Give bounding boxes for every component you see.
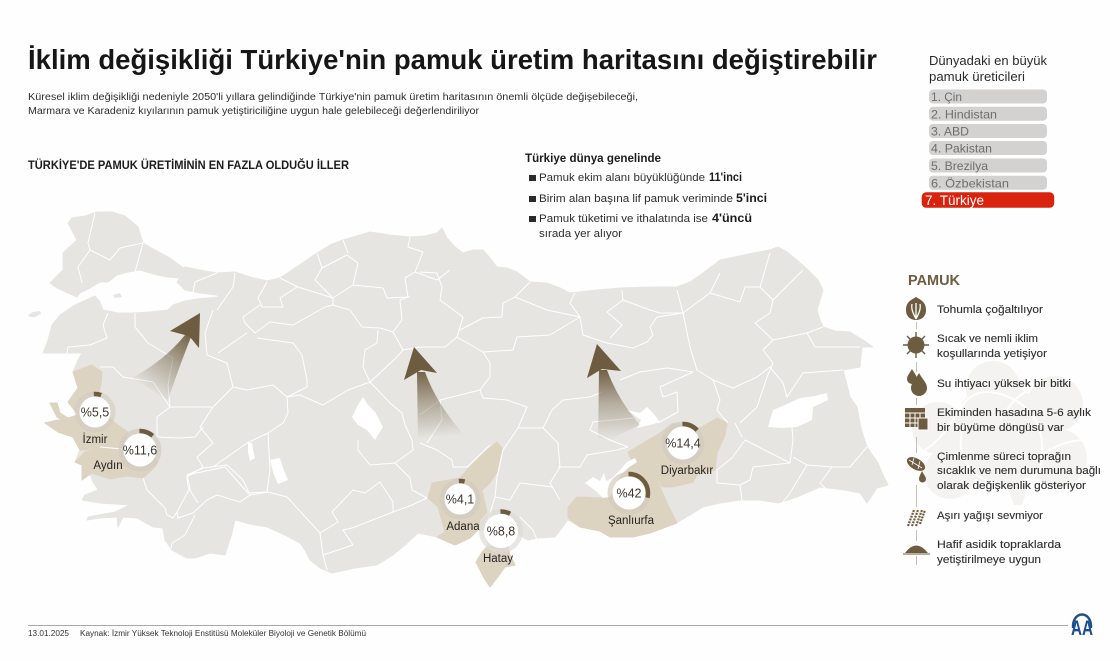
text: growth cycle: bir büyüme döngüsü var bbox=[937, 422, 1064, 434]
map of Türkiye bbox=[28, 212, 888, 587]
panel: Türkiye worldwide ranks: 5'inci bbox=[736, 191, 767, 205]
bubble: Hatay: %8,8 bbox=[487, 524, 515, 538]
panel: Türkiye worldwide ranks: sırada yer alıyor bbox=[539, 228, 622, 240]
intro text bbox=[28, 92, 638, 117]
cotton province: Diyarbakır bbox=[628, 418, 727, 487]
cotton boll watermark bbox=[912, 361, 1087, 505]
panel: Türkiye worldwide ranks: Pamuk tüketimi ve ithalatında ise bbox=[539, 213, 708, 225]
text: growth cycle bbox=[937, 407, 1091, 434]
text: climate bbox=[937, 333, 1047, 360]
text: soil: Hafif asidik topraklarda bbox=[937, 539, 1062, 551]
panel: largest producers: 6. Özbekistan bbox=[931, 176, 1009, 190]
island: Gökçeada bbox=[28, 311, 41, 317]
bubble: Şanlıurfa bbox=[608, 474, 655, 527]
panel: largest producers: 3. ABD bbox=[931, 124, 969, 138]
logo: AA: AA bbox=[1071, 617, 1093, 640]
icon: germinating seed bbox=[905, 454, 927, 482]
land: Thrace bbox=[50, 212, 182, 297]
bubble: Şanlıurfa: Şanlıurfa bbox=[608, 515, 655, 527]
cotton province: Hatay bbox=[476, 546, 515, 587]
text: rain: Aşırı yağışı sevmiyor bbox=[937, 510, 1043, 522]
panel heading: PAMUK bbox=[908, 273, 961, 289]
cotton province: İzmir bbox=[45, 365, 128, 450]
bubble: Adana bbox=[441, 480, 480, 533]
panel: largest producers: 4. Pakistan bbox=[931, 142, 992, 156]
map heading: TÜRKİYE'DE PAMUK ÜRETİMİNİN EN FAZLA OLDUĞU İLLER bbox=[28, 159, 350, 172]
text: seed: Tohumla çoğaltılıyor bbox=[937, 304, 1043, 316]
icon: seed bbox=[906, 297, 926, 320]
panel: Türkiye worldwide ranks: 4'üncü bbox=[712, 211, 752, 225]
panel: Türkiye worldwide ranks bbox=[525, 153, 767, 240]
icon: calendar bbox=[905, 408, 928, 430]
lakes bbox=[248, 393, 828, 498]
footer rule bbox=[28, 625, 1068, 626]
text: germination: sıcaklık ve nem durumuna bağlı bbox=[937, 465, 1101, 477]
text: germination bbox=[937, 451, 1101, 492]
icon: soil mound bbox=[903, 546, 930, 554]
panel: PAMUK facts bbox=[903, 273, 1101, 566]
cotton province: Aydın bbox=[75, 447, 158, 480]
bubble: Diyarbakır bbox=[661, 424, 713, 477]
bubble: Adana: %4,1 bbox=[446, 492, 474, 506]
bubble: İzmir: %5,5 bbox=[81, 406, 109, 420]
arrow: towards eastern Black Sea bbox=[587, 344, 640, 445]
text: water need: Su ihtiyacı yüksek bir bitki bbox=[937, 378, 1071, 390]
island in Marmara bbox=[113, 293, 122, 298]
panel: largest producers: pamuk üreticileri bbox=[929, 70, 1025, 84]
icon: water drops bbox=[907, 369, 927, 396]
intro text: Küresel iklim değişikliği nedeniyle 2050'li yıllara gelindiğinde Türkiye'nin pamuk üretim haritasının önemli ölçüde değişebileceği, bbox=[28, 92, 638, 103]
bubble: Aydın: %11,6 bbox=[123, 444, 157, 458]
bubble: Hatay bbox=[482, 512, 520, 565]
panel: largest producers bbox=[922, 54, 1054, 208]
bubble: Aydın: Aydın bbox=[93, 460, 123, 472]
land: Anatolia bbox=[43, 228, 888, 587]
bubble: İzmir bbox=[76, 393, 114, 446]
icon connector segments bbox=[916, 322, 918, 565]
footer: date: 13.01.2025 bbox=[28, 629, 70, 638]
arrow: towards central Black Sea bbox=[404, 347, 465, 440]
text: germination: olarak değişkenlik gösteriyor bbox=[937, 480, 1086, 492]
bubble: Diyarbakır: %14,4 bbox=[665, 436, 701, 450]
cotton province: Şanlıurfa bbox=[568, 462, 677, 537]
text: soil bbox=[937, 539, 1062, 566]
province borders bbox=[67, 213, 867, 570]
panel: Türkiye worldwide ranks: 11'inci bbox=[709, 170, 742, 184]
panel: Türkiye worldwide ranks: Birim alan başına lif pamuk veriminde bbox=[539, 193, 733, 205]
arrow: towards Marmara bbox=[132, 313, 200, 400]
text: germination: Çimlenme süreci toprağın bbox=[937, 451, 1071, 463]
text: growth cycle: Ekiminden hasadına 5-6 aylık bbox=[937, 407, 1091, 419]
bubble: Diyarbakır: Diyarbakır bbox=[661, 465, 713, 477]
panel: Türkiye worldwide ranks: Türkiye dünya genelinde bbox=[525, 153, 661, 165]
panel: largest producers: 1. Çin bbox=[931, 90, 962, 104]
text: climate: koşullarında yetişiyor bbox=[937, 348, 1047, 360]
cotton province: Adana bbox=[428, 442, 502, 545]
bubble: Adana: Adana bbox=[446, 521, 480, 533]
bubble: Şanlıurfa: %42 bbox=[616, 486, 642, 500]
bubble: Hatay: Hatay bbox=[483, 553, 513, 565]
intro text: Marmara ve Karadeniz kıyılarının pamuk yetiştiriciliğine uygun hale gelebileceği değerlendiriliyor bbox=[28, 106, 480, 117]
panel: Türkiye worldwide ranks: Pamuk ekim alanı büyüklüğünde bbox=[539, 172, 705, 184]
icon: rain pattern bbox=[908, 510, 925, 526]
title: İklim değişikliği Türkiye'nin pamuk üretim haritasını değiştirebilir bbox=[28, 44, 877, 75]
icon: sun bbox=[903, 332, 929, 358]
footer: source: Kaynak: İzmir Yüksek Teknoloji Enstitüsü Moleküler Biyoloji ve Genetik Bölümü bbox=[80, 629, 366, 638]
text: soil: yetiştirilmeye uygun bbox=[937, 554, 1041, 566]
panel: largest producers: Dünyadaki en büyük bbox=[929, 54, 1048, 68]
panel: largest producers: 5. Brezilya bbox=[931, 159, 988, 173]
panel: largest producers: 7. Türkiye bbox=[925, 193, 984, 208]
bubble: Aydın bbox=[93, 431, 159, 472]
logo: AA bbox=[1071, 614, 1093, 640]
text: climate: Sıcak ve nemli iklim bbox=[937, 333, 1038, 345]
bubble: İzmir: İzmir bbox=[83, 433, 108, 446]
panel: largest producers: 2. Hindistan bbox=[931, 107, 997, 121]
